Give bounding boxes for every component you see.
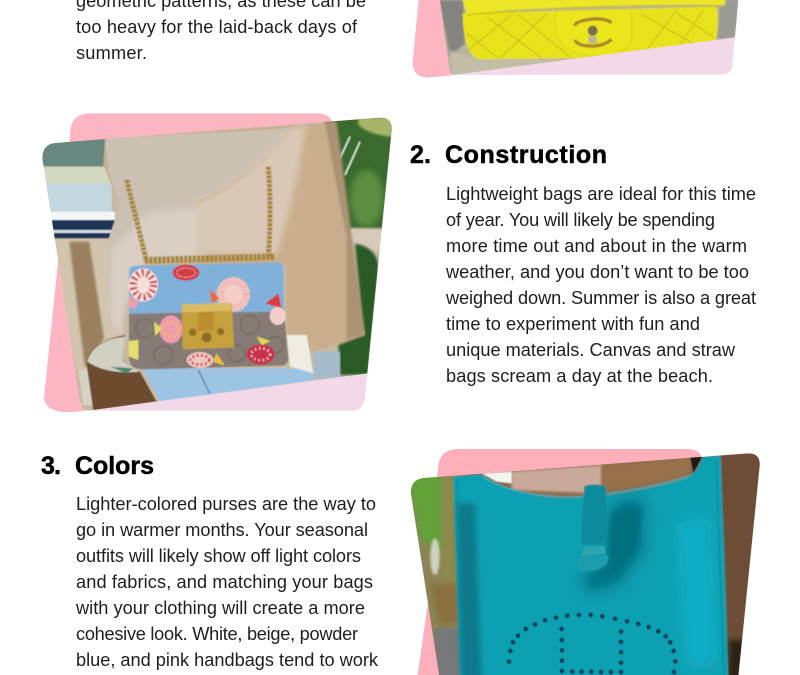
photo panel: yellow quilted bag bbox=[413, 0, 743, 80]
brown background right bbox=[720, 450, 763, 675]
heading: 3. Colors: 3. bbox=[41, 452, 61, 480]
text block: colors: go in warmer months. Your seasonal bbox=[76, 520, 368, 540]
text block: colors bbox=[75, 494, 379, 670]
photo of turquoise bag bbox=[407, 450, 763, 675]
green leaves bbox=[323, 118, 392, 230]
text block: colors: with your clothing will create a more bbox=[75, 598, 365, 618]
lilac backing strip bbox=[83, 373, 367, 411]
apple prints bbox=[129, 265, 286, 368]
flap tab and logo clasp bbox=[555, 9, 632, 56]
text block: construction: bags scream a day at the beach. bbox=[446, 366, 713, 386]
photo of yellow bag bbox=[440, 0, 738, 74]
background through the bag opening bbox=[512, 465, 602, 493]
sweater bbox=[103, 123, 365, 352]
gold chain bbox=[127, 167, 275, 262]
text block: colors: blue, and pink handbags tend to work bbox=[76, 650, 379, 670]
basket bbox=[87, 335, 157, 411]
leather strap tab bbox=[581, 484, 607, 545]
text block: construction: of year. You will likely be spending bbox=[446, 210, 715, 230]
perforated H logo bbox=[507, 613, 678, 674]
text block: colors: Lighter-colored purses are the way to bbox=[76, 494, 376, 514]
heading: 2. Construction: Construction bbox=[445, 141, 607, 169]
photo panel: Gucci apple print bag bbox=[37, 112, 397, 415]
text block: construction: unique materials. Canvas and straw bbox=[446, 340, 736, 360]
text block: construction: more time out and about in the warm bbox=[446, 236, 747, 256]
text block: colors: and fabrics, and matching your bags bbox=[76, 572, 373, 592]
heading: 3. Colors: Colors bbox=[75, 452, 154, 480]
gold padlock clasp bbox=[182, 303, 234, 349]
text block: colors: cohesive look. White, beige, powder bbox=[76, 624, 358, 644]
text block: colors: outfits will likely show off light colors bbox=[76, 546, 361, 566]
photo of handbag bbox=[37, 112, 397, 415]
bag shading bbox=[457, 497, 717, 675]
text block: construction: weighed down. Summer is also a great bbox=[445, 288, 756, 308]
lilac backing strip bbox=[450, 35, 735, 75]
heading: 2. Construction: 2. bbox=[410, 141, 431, 169]
jeans bbox=[142, 368, 313, 402]
intro text continued: too heavy for the laid-back days of bbox=[76, 17, 358, 37]
text block: construction: Lightweight bags are ideal for this time bbox=[446, 184, 756, 204]
intro text continued bbox=[76, 0, 366, 63]
blurred garden background bbox=[411, 475, 464, 646]
pink backing shape bbox=[413, 0, 457, 78]
heading: 3. Colors bbox=[41, 452, 154, 480]
pink backing shape bbox=[44, 113, 333, 412]
text block: construction bbox=[445, 184, 756, 386]
bag blue flap bbox=[129, 262, 284, 314]
text block: construction: weather, and you don’t want to be too bbox=[445, 262, 749, 282]
text block: construction: time to experiment with fun and bbox=[446, 314, 700, 334]
intro text continued: summer. bbox=[76, 43, 147, 63]
bag GG canvas body bbox=[129, 312, 288, 369]
window background bbox=[40, 138, 123, 405]
photo panel: turquoise Hermes bag bbox=[407, 449, 763, 675]
pink backing shape bbox=[417, 449, 702, 675]
price tag bbox=[287, 335, 313, 373]
bag body bbox=[453, 456, 728, 675]
